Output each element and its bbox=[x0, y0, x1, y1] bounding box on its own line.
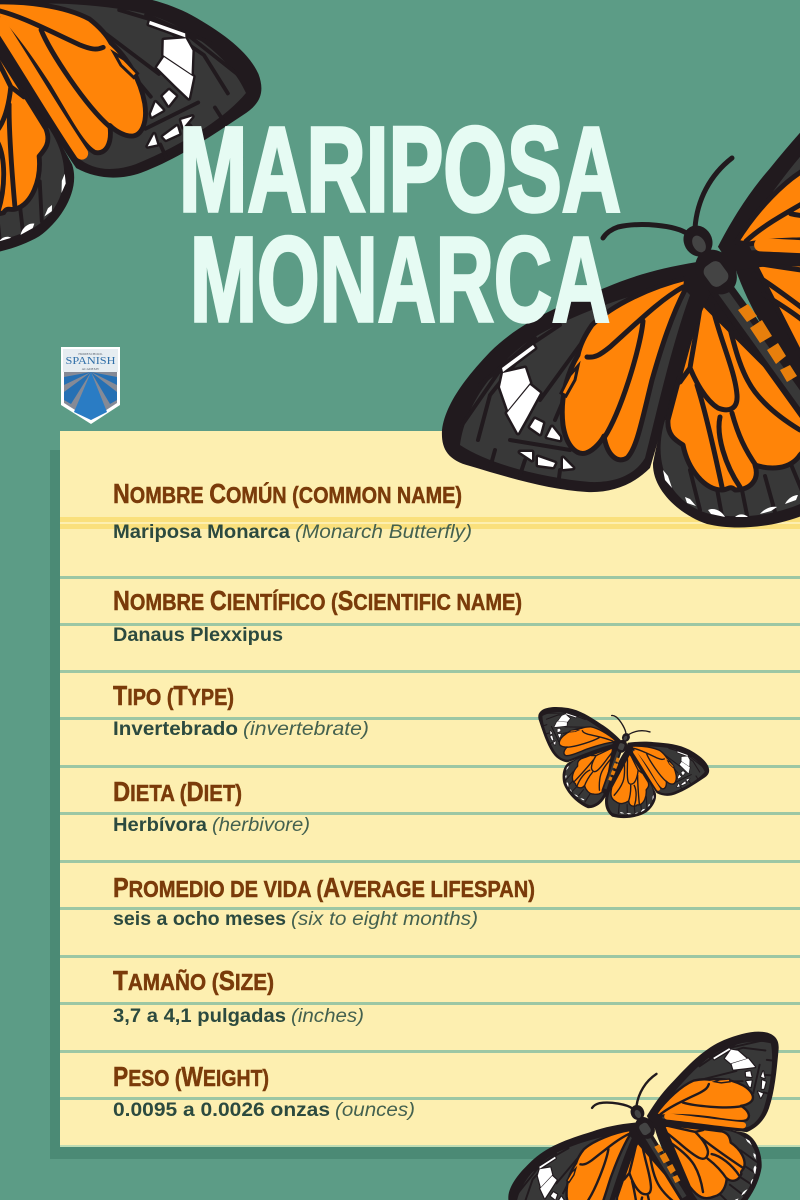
text block: size: (inches) bbox=[291, 1006, 364, 1027]
text block: common name: (Monarch Butterfly) bbox=[295, 522, 472, 543]
title bbox=[179, 101, 621, 347]
text block: scientific name bbox=[113, 585, 522, 646]
text block: diet bbox=[113, 776, 310, 836]
text block: common name bbox=[113, 478, 472, 543]
text block: weight: 0.0095 a 0.0026 onzas bbox=[113, 1100, 330, 1121]
text block: type bbox=[113, 680, 369, 740]
text block: lifespan: (six to eight months) bbox=[291, 909, 478, 930]
text block: weight: (ounces) bbox=[335, 1100, 415, 1121]
panel: lined paper bbox=[60, 431, 800, 1147]
panel shadow bbox=[50, 450, 800, 1159]
text block: diet: Herbívora bbox=[113, 815, 207, 836]
text block: size bbox=[113, 965, 364, 1027]
text block: type: TIPO (TYPE) bbox=[113, 680, 234, 711]
text block: scientific name: Danaus Plexxipus bbox=[113, 625, 283, 646]
text block: weight bbox=[113, 1061, 415, 1121]
text block: size: TAMAÑO (SIZE) bbox=[113, 965, 274, 996]
text block: weight: PESO (WEIGHT) bbox=[113, 1061, 269, 1092]
logo: Spanish academy shield: ACADEMY bbox=[82, 367, 100, 371]
text block: type: (invertebrate) bbox=[243, 719, 369, 740]
butterfly: small centre bbox=[521, 642, 735, 862]
text block: common name: Mariposa Monarca bbox=[113, 522, 290, 543]
text block: common name: NOMBRE COMÚN (COMMON NAME) bbox=[113, 478, 462, 509]
butterfly: top left bbox=[0, 0, 351, 410]
text block: lifespan bbox=[113, 872, 535, 930]
logo: Spanish academy shield: HOMESCHOOL bbox=[78, 352, 103, 356]
text block: diet: DIETA (DIET) bbox=[113, 776, 242, 807]
text block: type: Invertebrado bbox=[113, 719, 238, 740]
logo: Spanish academy shield: SPANISH bbox=[66, 356, 116, 367]
text block: lifespan: seis a ocho meses bbox=[113, 909, 286, 930]
butterfly: large right bbox=[442, 4, 800, 528]
text block: diet: (herbivore) bbox=[212, 815, 310, 836]
butterfly: bottom right bbox=[505, 991, 800, 1200]
text block: lifespan: PROMEDIO DE VIDA (AVERAGE LIFESPAN) bbox=[113, 872, 535, 903]
text block: scientific name: NOMBRE CIENTÍFICO (SCIENTIFIC NAME) bbox=[113, 585, 522, 616]
logo: Spanish academy shield bbox=[61, 347, 120, 424]
text block: size: 3,7 a 4,1 pulgadas bbox=[113, 1006, 286, 1027]
